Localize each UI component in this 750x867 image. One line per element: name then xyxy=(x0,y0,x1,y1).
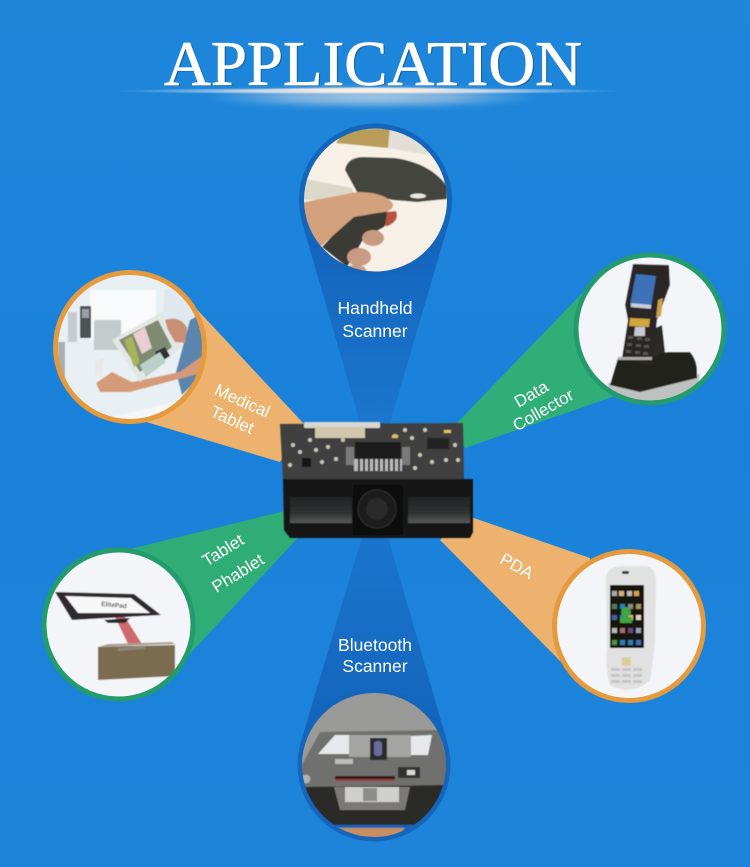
circle: tablet phablet photo: ElitePad xyxy=(101,601,127,610)
label: tablet phablet: Phablet xyxy=(209,550,268,597)
label: data collector: Data xyxy=(511,377,552,411)
central scan engine module xyxy=(280,422,473,538)
beam: handheld scanner xyxy=(302,222,449,440)
beam: bluetooth scanner xyxy=(300,530,448,745)
label: bluetooth scanner xyxy=(338,635,412,676)
label: medical tablet xyxy=(208,380,273,438)
beam: PDA xyxy=(440,515,590,672)
label: data collector: Collector xyxy=(509,385,577,435)
title with glow: APPLICATION xyxy=(166,29,584,100)
beam: data collector xyxy=(455,284,615,448)
label: medical tablet: Tablet xyxy=(208,402,257,438)
label: PDA: PDA xyxy=(497,549,537,583)
beam: tablet phablet xyxy=(118,511,305,671)
circle: PDA photo xyxy=(552,549,706,703)
label: handheld scanner: Handheld xyxy=(338,298,412,318)
beam: medical tablet xyxy=(143,287,305,462)
circle: tablet phablet photo xyxy=(42,548,196,702)
label: bluetooth scanner: Scanner xyxy=(342,656,408,676)
label: medical tablet: Medical xyxy=(212,380,273,422)
label: handheld scanner xyxy=(338,298,412,341)
circle: data collector photo xyxy=(574,252,726,406)
circle: handheld scanner photo xyxy=(299,124,452,276)
label: tablet phablet: Tablet xyxy=(199,530,248,570)
label: bluetooth scanner: Bluetooth xyxy=(338,635,412,655)
title with glow: APPLICATION xyxy=(164,28,582,99)
label: handheld scanner: Scanner xyxy=(342,321,408,341)
label: tablet phablet xyxy=(199,530,268,597)
circle: bluetooth scanner photo xyxy=(298,688,450,842)
circle: medical tablet photo xyxy=(53,270,207,425)
